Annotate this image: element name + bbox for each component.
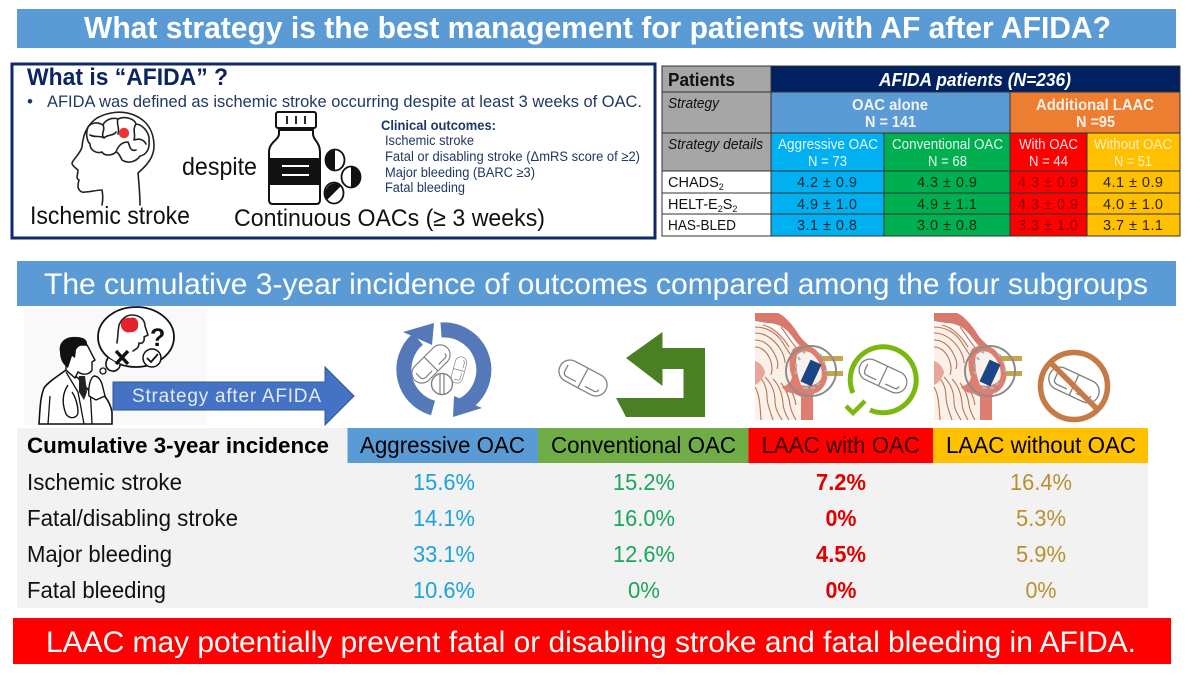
table: cumulative 3-year incidence: 5.9% xyxy=(1016,541,1066,567)
table: cumulative 3-year incidence: LAAC with OAC xyxy=(762,432,920,458)
table: patient characteristics: With OAC xyxy=(1019,137,1078,153)
table: patient characteristics: 4.3 ± 0.9 xyxy=(1018,175,1078,191)
table: cumulative 3-year incidence: Aggressive OAC xyxy=(360,432,525,458)
clinical outcomes list xyxy=(381,118,640,195)
table: cumulative 3-year incidence: 15.6% xyxy=(413,469,475,495)
icon: head with brain xyxy=(72,112,154,205)
table: cumulative 3-year incidence: Conventional OAC xyxy=(551,432,736,458)
table: cumulative 3-year incidence: 16.0% xyxy=(613,505,675,531)
arrow: strategy after AFIDA: Strategy after AFIDA xyxy=(132,386,321,407)
table: cumulative 3-year incidence: 33.1% xyxy=(413,541,475,567)
table: cumulative 3-year incidence: 12.6% xyxy=(613,541,675,567)
table: patient characteristics: 4.3 ± 0.9 xyxy=(1018,197,1078,213)
table: cumulative 3-year incidence: 0% xyxy=(628,577,660,603)
clinical outcomes list: Clinical outcomes: xyxy=(381,118,496,133)
table: cumulative 3-year incidence: 10.6% xyxy=(413,577,475,603)
table: cumulative 3-year incidence: 14.1% xyxy=(413,505,475,531)
table: cumulative 3-year incidence: Cumulative 3-year incidence xyxy=(27,433,329,458)
heading: what is AFIDA: What is “AFIDA” ? xyxy=(27,64,228,91)
table: patient characteristics: 2 xyxy=(718,204,723,214)
table: patient characteristics: 3.3 ± 1.0 xyxy=(1018,218,1078,234)
table: patient characteristics xyxy=(662,66,1180,236)
definition text: • xyxy=(27,92,33,111)
definition text: AFIDA was defined as ischemic stroke occurring despite at least 3 weeks of OAC. xyxy=(47,92,642,111)
conclusion banner: LAAC may potentially prevent fatal or disabling stroke and fatal bleeding in AFIDA. xyxy=(46,626,1136,659)
conclusion banner xyxy=(13,618,1171,664)
table: cumulative 3-year incidence: 7.2% xyxy=(816,469,866,495)
table: cumulative 3-year incidence: Major bleeding xyxy=(27,541,172,567)
table: patient characteristics: HAS-BLED xyxy=(668,218,736,234)
table: patient characteristics: Strategy details xyxy=(668,137,763,153)
table: patient characteristics: 3.7 ± 1.1 xyxy=(1103,218,1163,234)
table: patient characteristics: Strategy xyxy=(668,96,720,112)
table: cumulative 3-year incidence: LAAC without OAC xyxy=(946,432,1136,458)
table: cumulative 3-year incidence xyxy=(17,428,1148,608)
clinical outcomes list: Fatal or disabling stroke (ΔmRS score of ≥2) xyxy=(385,149,640,164)
section banner: The cumulative 3-year incidence of outcomes compared among the four subgroups xyxy=(44,268,1148,301)
table: patient characteristics: HELT-E xyxy=(668,197,718,213)
arrow: strategy after AFIDA xyxy=(113,367,354,425)
table: patient characteristics: N = 51 xyxy=(1114,154,1152,170)
icon: doctor thinking xyxy=(24,307,207,425)
table: patient characteristics: N = 141 xyxy=(865,114,916,131)
icon: conventional OAC xyxy=(555,332,705,417)
icon: doctor thinking: ? xyxy=(150,324,165,352)
table: patient characteristics: Without OAC xyxy=(1094,137,1172,153)
clinical outcomes list: Ischemic stroke xyxy=(385,133,474,148)
table: patient characteristics: CHADS xyxy=(668,175,719,191)
icon: aggressive OAC xyxy=(403,323,484,417)
title banner: What strategy is the best management for patients with AF after AFIDA? xyxy=(84,10,1111,45)
table: patient characteristics: 4.9 ± 1.0 xyxy=(797,197,857,213)
label: ischemic stroke: Ischemic stroke xyxy=(30,202,190,230)
label: despite: despite xyxy=(182,153,257,181)
clinical outcomes list: Fatal bleeding xyxy=(385,180,465,195)
table: patient characteristics: Aggressive OAC xyxy=(778,137,878,153)
table: patient characteristics: 4.1 ± 0.9 xyxy=(1103,175,1163,191)
table: patient characteristics: Additional LAAC xyxy=(1036,97,1154,114)
table: patient characteristics: N = 68 xyxy=(928,154,967,170)
table: cumulative 3-year incidence: Ischemic stroke xyxy=(27,469,182,495)
table: cumulative 3-year incidence: 0% xyxy=(1026,577,1056,603)
table: cumulative 3-year incidence: 0% xyxy=(826,577,856,603)
table: patient characteristics: 4.0 ± 1.0 xyxy=(1103,197,1163,213)
table: cumulative 3-year incidence: 5.3% xyxy=(1016,505,1066,531)
table: patient characteristics: S xyxy=(723,197,732,213)
table: patient characteristics: 4.3 ± 0.9 xyxy=(917,175,977,191)
table: cumulative 3-year incidence: 0% xyxy=(826,505,856,531)
table: patient characteristics: N = 73 xyxy=(808,154,847,170)
table: cumulative 3-year incidence: Fatal bleeding xyxy=(27,577,166,603)
clinical outcomes list: Major bleeding (BARC ≥3) xyxy=(385,165,535,180)
table: cumulative 3-year incidence: 4.5% xyxy=(816,541,866,567)
label: continuous OACs: Continuous OACs (≥ 3 weeks) xyxy=(234,205,545,232)
table: patient characteristics: AFIDA patients (N=236) xyxy=(878,70,1071,90)
table: patient characteristics: 2 xyxy=(719,182,724,192)
table: patient characteristics: 4.2 ± 0.9 xyxy=(797,175,857,191)
table: patient characteristics: 3.0 ± 0.8 xyxy=(917,218,977,234)
table: patient characteristics: 4.9 ± 1.1 xyxy=(917,197,977,213)
table: cumulative 3-year incidence: 16.4% xyxy=(1010,469,1072,495)
icon: LAAC with OAC xyxy=(755,313,916,420)
table: patient characteristics: Conventional OAC xyxy=(892,137,1003,153)
section banner xyxy=(17,261,1176,306)
table: patient characteristics: 3.1 ± 0.8 xyxy=(797,218,857,234)
table: patient characteristics: Patients xyxy=(668,70,735,90)
table: cumulative 3-year incidence: 15.2% xyxy=(613,469,675,495)
table: patient characteristics: N = 44 xyxy=(1029,154,1068,170)
table: patient characteristics: OAC alone xyxy=(852,97,928,114)
table: patient characteristics: 2 xyxy=(732,204,737,214)
table: patient characteristics: N =95 xyxy=(1076,114,1115,131)
icon: pill bottle xyxy=(269,112,360,204)
panel: what is AFIDA xyxy=(12,64,655,238)
table: cumulative 3-year incidence: Fatal/disabling stroke xyxy=(27,505,238,531)
icon: LAAC without OAC xyxy=(934,313,1108,420)
